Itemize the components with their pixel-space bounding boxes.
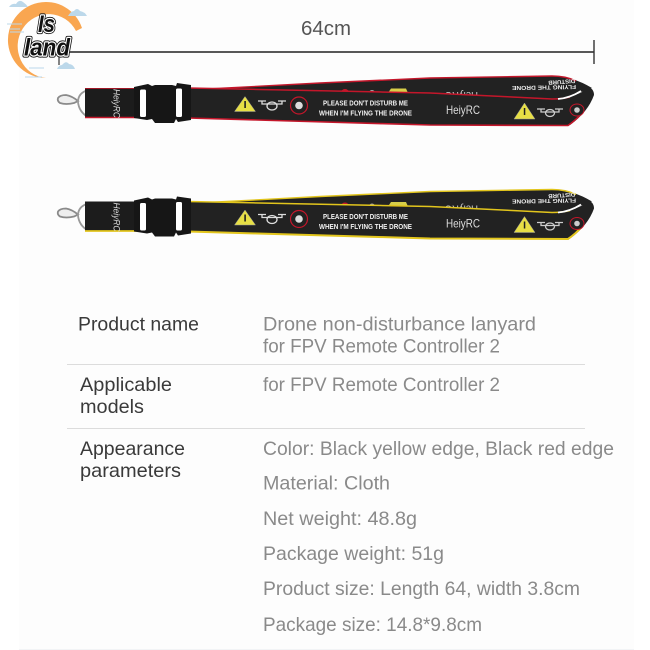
icon: orange crescent: [8, 2, 82, 78]
row: appearance parameters: Product size: Length 64, width 3.8cm: [263, 578, 580, 600]
logo text: land: [24, 34, 71, 62]
back strap: DISTURB: [548, 191, 575, 198]
drone icon 2: [537, 109, 563, 116]
row: appearance parameters: parameters: [80, 460, 181, 482]
front strap: WHEN I'M FLYING THE DRONE: [319, 110, 412, 118]
row: appearance parameters: Material: Cloth: [263, 472, 390, 494]
row: appearance parameters: Package weight: 51g: [263, 543, 444, 565]
back strap: FLYING THE DRONE: [512, 83, 576, 90]
prohibition icon 2: [570, 104, 584, 116]
front strap: [188, 86, 594, 126]
row: applicable models: Applicable: [80, 374, 172, 396]
left strap: [85, 202, 137, 232]
left strap: [85, 88, 137, 118]
dimension line: 64cm: 64cm: [301, 18, 351, 40]
back strap: FLYING THE DRONE: [512, 197, 576, 204]
front strap: WHEN I'M FLYING THE DRONE: [319, 224, 412, 231]
row: product name: for FPV Remote Controller 2: [263, 336, 500, 358]
buckle: [134, 83, 191, 123]
left strap: HeiyRC: [110, 89, 122, 118]
logo: Is land: [7, 1, 87, 78]
clasp: [58, 90, 88, 117]
back strap: [188, 190, 592, 214]
prohibition icon 2: [570, 218, 584, 230]
prohibition icon: [290, 210, 308, 228]
spec table: [67, 314, 614, 636]
logo text: [24, 11, 71, 62]
brand: HeiyRC: [446, 103, 480, 117]
warning icon: [234, 96, 256, 112]
lanyard: red edge: [58, 76, 594, 126]
row: appearance parameters: Appearance: [80, 438, 185, 460]
row: applicable models: for FPV Remote Controller 2: [263, 374, 500, 396]
back strap: DISTURB: [548, 77, 575, 85]
drone icon 2: [537, 222, 563, 230]
row: appearance parameters: Package size: 14.8*9.8cm: [263, 614, 482, 636]
logo text: Is: [38, 11, 55, 38]
row: product name: Product name: [78, 314, 199, 336]
row: applicable models: [80, 374, 500, 418]
back strap: [188, 76, 592, 100]
row: product name: [78, 314, 536, 358]
drone icon: [258, 101, 286, 110]
row: appearance parameters: [80, 438, 614, 636]
warning icon: [234, 210, 256, 225]
drone icon: [258, 214, 286, 224]
message: PLEASE DON'T DISTURB ME: [323, 100, 408, 108]
left strap: HeiyRC: [110, 202, 122, 232]
warning icon 2: [514, 103, 535, 119]
logo text: Is: [38, 11, 55, 38]
lanyard: yellow edge: [58, 190, 594, 239]
message: PLEASE DON'T DISTURB ME: [323, 214, 408, 221]
back strap: HeiyRC: [445, 202, 478, 214]
row: appearance parameters: Color: Black yellow edge, Black red edge: [263, 438, 614, 460]
brand: HeiyRC: [446, 216, 480, 230]
buckle: [134, 196, 191, 236]
icon: clouds: [7, 1, 87, 77]
row: applicable models: models: [80, 396, 144, 418]
prohibition icon: [290, 97, 308, 114]
clasp: [58, 204, 88, 230]
row: product name: Drone non-disturbance lanyard: [263, 314, 536, 336]
warning icon 2: [514, 216, 535, 232]
back strap: HeiyRC: [445, 89, 478, 100]
logo text: land: [24, 34, 71, 62]
row: appearance parameters: Net weight: 48.8g: [263, 508, 417, 530]
front strap: [188, 200, 594, 239]
